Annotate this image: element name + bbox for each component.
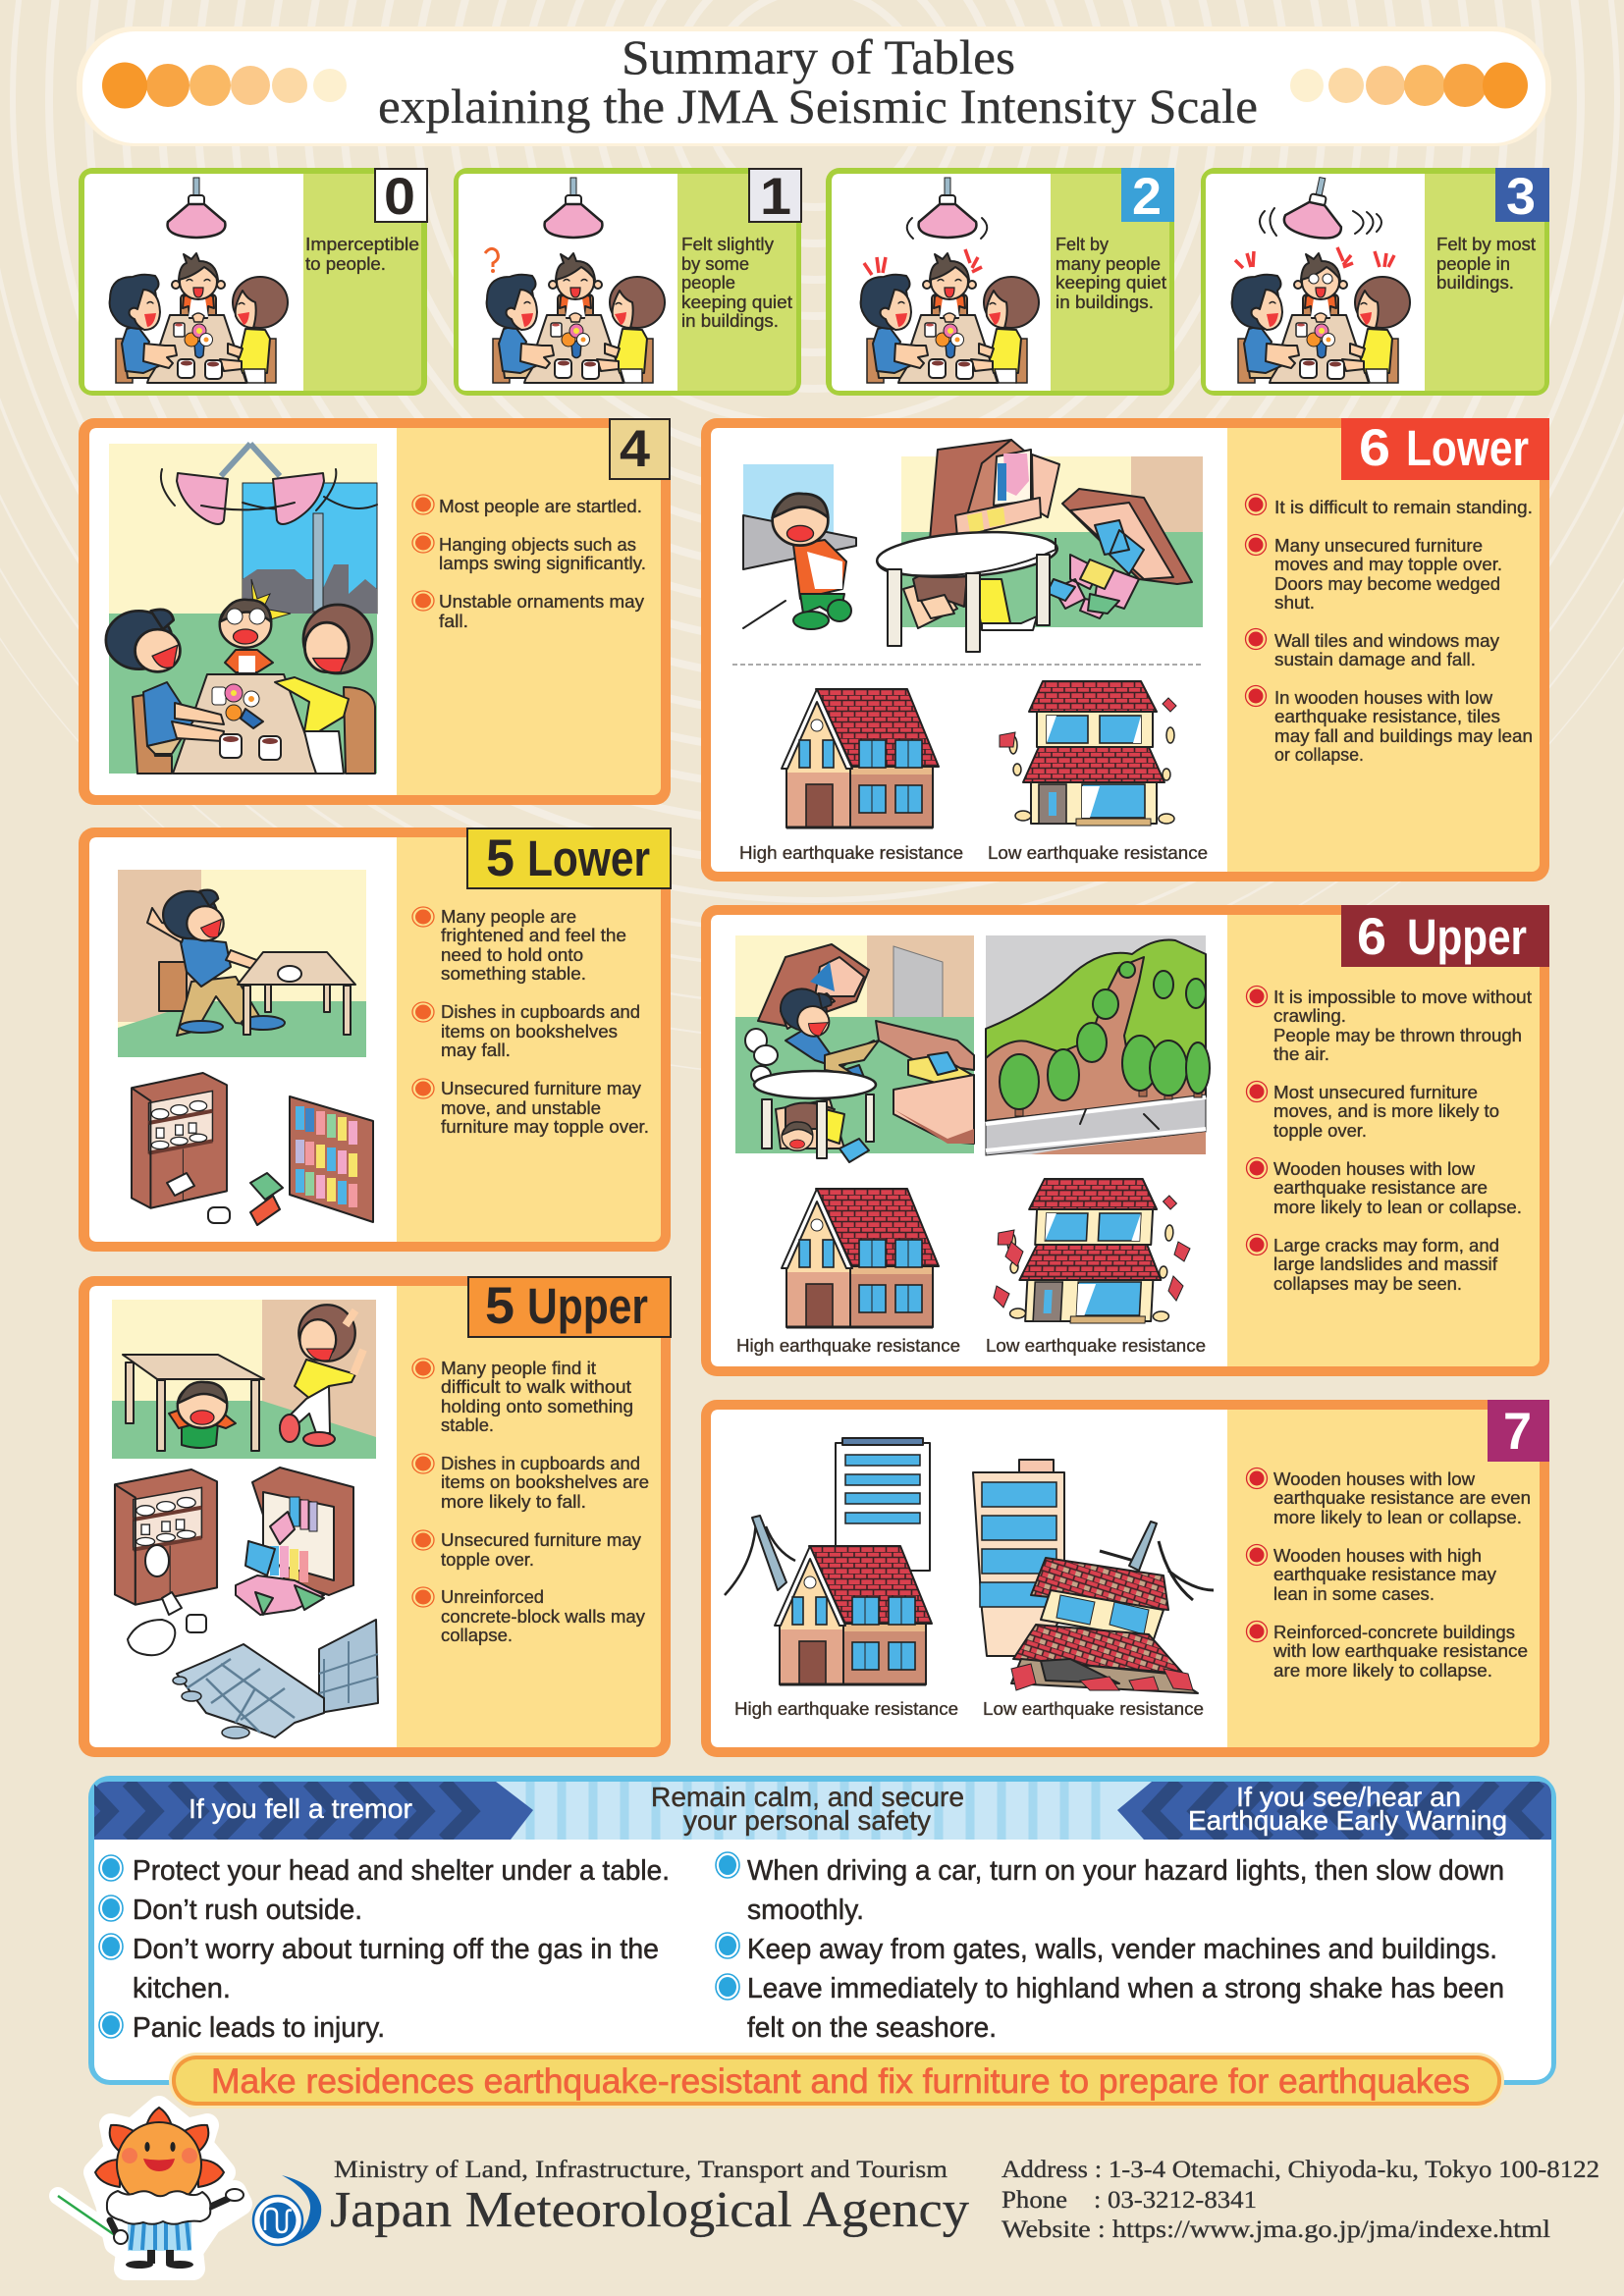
list: early warning advice: When driving a car, turn on your hazard lights, then slow down xyxy=(747,1855,1504,1887)
illustration: swinging lamp and family xyxy=(1232,172,1410,383)
logo xyxy=(253,2175,321,2245)
bullet list: Reinforced-concrete buildings xyxy=(1273,1623,1515,1642)
bullet list: earthquake resistance are xyxy=(1273,1178,1488,1198)
agency name: Japan Meteorological Agency xyxy=(330,2182,969,2238)
bullet list: Unreinforced xyxy=(441,1587,544,1607)
bullet list: In wooden houses with low xyxy=(1274,688,1493,708)
badge 5 lower: Lower xyxy=(527,830,650,886)
captions xyxy=(736,1336,1206,1356)
badge 0: 0 xyxy=(384,168,415,226)
panel: advice box xyxy=(82,1776,1556,2085)
badge 3: 3 xyxy=(1506,168,1536,226)
bullet list: earthquake resistance may xyxy=(1273,1565,1496,1584)
bullet list: concrete-block walls may xyxy=(441,1607,645,1627)
badge 5 upper xyxy=(468,1277,671,1337)
badge 6 lower: 6 xyxy=(1359,419,1390,477)
bullet list: fall. xyxy=(439,612,468,631)
bullet list: shut. xyxy=(1274,593,1315,613)
badge 7 xyxy=(1488,1400,1549,1462)
panel: intensity 3 xyxy=(1201,168,1549,396)
bullet list: It is difficult to remain standing. xyxy=(1274,498,1533,517)
bullet list: Many people find it xyxy=(441,1359,596,1378)
bullet list: Dishes in cupboards and xyxy=(441,1454,640,1473)
bullet list: more likely to lean or collapse. xyxy=(1273,1198,1522,1217)
bullet list xyxy=(1247,986,1532,1294)
description: buildings. xyxy=(1436,273,1514,293)
bullet list: sustain damage and fall. xyxy=(1274,650,1476,669)
illustration: buildings and collapsed houses xyxy=(725,1438,1214,1693)
badge 4 xyxy=(610,419,670,479)
illustration: man stumbling, table, cupboard and bookshelf xyxy=(118,870,373,1225)
description xyxy=(1056,235,1166,312)
badge 5 lower xyxy=(467,828,671,888)
bullet list: holding onto something xyxy=(441,1397,633,1416)
list: early warning advice: Keep away from gates, walls, vender machines and buildings. xyxy=(747,1934,1497,1965)
bullet list: moves and may topple over. xyxy=(1274,555,1502,574)
list: tremor advice: Panic leads to injury. xyxy=(133,2012,385,2044)
bullet list: collapse. xyxy=(441,1626,513,1645)
contact details xyxy=(1001,2157,1599,2243)
bullet list xyxy=(412,495,646,631)
bullet list: It is impossible to move without xyxy=(1273,988,1532,1007)
description: many people xyxy=(1056,254,1161,274)
description: Imperceptible xyxy=(305,235,419,254)
bullet list: large landslides and massif xyxy=(1273,1255,1498,1274)
header arrow left: If you fell a tremor xyxy=(189,1793,412,1824)
panel: intensity 5 lower xyxy=(79,828,671,1252)
list: early warning advice xyxy=(716,1852,1504,2044)
illustration: lamp and family xyxy=(485,178,665,383)
bullet list: items on bookshelves are xyxy=(441,1472,649,1492)
badge 6 upper: Upper xyxy=(1407,909,1527,965)
bullet list xyxy=(412,907,649,1137)
bullet list: are more likely to collapse. xyxy=(1273,1661,1492,1681)
illustration: family startled under swinging lamps xyxy=(106,444,377,774)
captions: Low earthquake resistance xyxy=(983,1699,1204,1719)
captions: Low earthquake resistance xyxy=(988,843,1208,863)
contact details: Address : 1-3-4 Otemachi, Chiyoda-ku, Tokyo 100-8122 xyxy=(1001,2157,1599,2183)
list: tremor advice xyxy=(99,1855,670,2044)
bullet list: Doors may become wedged xyxy=(1274,574,1500,594)
bullet list: earthquake resistance, tiles xyxy=(1274,707,1500,726)
badge 3 xyxy=(1495,168,1549,226)
bullet list: with low earthquake resistance xyxy=(1272,1641,1528,1661)
description: people in xyxy=(1436,254,1510,274)
panel: intensity 0 xyxy=(79,168,427,396)
badge 1 xyxy=(749,168,801,226)
bullet list: Unsecured furniture may xyxy=(441,1079,641,1098)
list: early warning advice: felt on the seashore. xyxy=(747,2012,997,2044)
list: tremor advice: Don’t rush outside. xyxy=(133,1895,362,1926)
title text: explaining the JMA Seismic Intensity Scale xyxy=(378,79,1258,133)
description: in buildings. xyxy=(681,311,779,331)
description: people xyxy=(681,273,735,293)
contact details: Website : https://www.jma.go.jp/jma/indexe.html xyxy=(1001,2216,1550,2243)
bullet list: crawling. xyxy=(1273,1006,1346,1026)
bullet list: lean in some cases. xyxy=(1273,1584,1435,1604)
header centre: Remain calm, and secure xyxy=(651,1782,964,1812)
bullet list: Wooden houses with high xyxy=(1273,1546,1482,1566)
description: keeping quiet xyxy=(681,293,792,312)
decorative circles left xyxy=(102,63,347,108)
bullet list: earthquake resistance are even xyxy=(1273,1488,1531,1508)
description: to people. xyxy=(305,254,386,274)
illustration: falling furniture and shelter under table xyxy=(732,440,1204,828)
badge 6 lower: Lower xyxy=(1406,420,1529,476)
description xyxy=(1436,235,1536,293)
bullet list: Dishes in cupboards and xyxy=(441,1002,640,1022)
header arrow right: Earthquake Early Warning xyxy=(1188,1805,1507,1836)
description xyxy=(681,235,792,331)
bullet list: Many unsecured furniture xyxy=(1274,536,1483,556)
list: early warning advice: Leave immediately to highland when a strong shake has been xyxy=(747,1973,1504,2004)
bullet list: the air. xyxy=(1273,1044,1329,1064)
bullet list: or collapse. xyxy=(1274,745,1364,765)
panel: intensity 5 upper xyxy=(79,1276,671,1757)
banner: preparedness message: Make residences earthquake-resistant and fix furniture to prepare for earthquakes xyxy=(211,2062,1470,2101)
bullet list xyxy=(1245,495,1533,765)
illustration: under the table, bracing on wall, furniture, block wall xyxy=(112,1300,378,1738)
captions: High earthquake resistance xyxy=(736,1336,960,1356)
bullet list: move, and unstable xyxy=(441,1098,601,1118)
captions xyxy=(739,843,1208,863)
bullet list: Many people are xyxy=(441,907,576,927)
bullet list: Wooden houses with low xyxy=(1273,1469,1476,1489)
badge 5 upper: 5 xyxy=(485,1277,514,1335)
bullet list: Wall tiles and windows may xyxy=(1274,631,1499,651)
panel: intensity 1 xyxy=(454,168,801,396)
captions: High earthquake resistance xyxy=(734,1699,958,1719)
bullet list: Hanging objects such as xyxy=(439,535,636,555)
bullet list: stable. xyxy=(441,1415,494,1435)
title text xyxy=(378,29,1258,133)
illustration: lamp and family xyxy=(110,178,288,383)
illustration: lamp and family xyxy=(861,178,1039,383)
panel: intensity 4 xyxy=(79,418,671,805)
list: tremor advice: Don’t worry about turning off the gas in the xyxy=(133,1934,659,1965)
bullet list: topple over. xyxy=(1273,1121,1367,1141)
description xyxy=(305,235,419,274)
description: by some xyxy=(681,254,749,274)
contact details: Phone : 03-3212-8341 xyxy=(1001,2187,1257,2214)
captions xyxy=(734,1699,1204,1719)
mascot xyxy=(58,2108,244,2269)
agency name xyxy=(330,2157,969,2238)
bullet list: collapses may be seen. xyxy=(1273,1274,1462,1294)
badge 7: 7 xyxy=(1503,1403,1532,1461)
bullet list: may fall. xyxy=(441,1041,511,1060)
badge 4: 4 xyxy=(620,420,651,478)
bullet list: more likely to lean or collapse. xyxy=(1273,1508,1522,1527)
badge 0 xyxy=(375,168,427,226)
badge 2 xyxy=(1121,168,1174,226)
badge 5 lower: 5 xyxy=(486,829,514,887)
badge 2: 2 xyxy=(1132,168,1162,226)
title banner xyxy=(77,27,1551,146)
bullet list: Wooden houses with low xyxy=(1273,1159,1476,1179)
badge 6 upper: 6 xyxy=(1357,908,1386,966)
panel: intensity 2 xyxy=(826,168,1174,396)
list: tremor advice: Protect your head and shelter under a table. xyxy=(133,1855,670,1887)
bullet list: Most unsecured furniture xyxy=(1273,1083,1478,1102)
bullet list: more likely to fall. xyxy=(441,1492,586,1512)
decorative circles right xyxy=(1290,63,1528,108)
bullet list: lamps swing significantly. xyxy=(439,554,646,573)
captions: Low earthquake resistance xyxy=(986,1336,1206,1356)
bullet list xyxy=(412,1359,649,1645)
badge 1: 1 xyxy=(760,168,791,226)
bullet list: may fall and buildings may lean xyxy=(1274,726,1533,746)
bullet list: Large cracks may form, and xyxy=(1273,1236,1499,1255)
badge 6 upper xyxy=(1341,905,1549,967)
description: keeping quiet xyxy=(1056,273,1166,293)
header arrow left xyxy=(82,1782,533,1840)
header arrow right xyxy=(1117,1782,1551,1840)
captions: High earthquake resistance xyxy=(739,843,963,863)
bullet list: items on bookshelves xyxy=(441,1022,618,1041)
description: Felt slightly xyxy=(681,235,774,254)
illustration: toppled room and landslide xyxy=(735,935,1210,1327)
list: early warning advice: smoothly. xyxy=(747,1895,864,1926)
bullet list: Unstable ornaments may xyxy=(439,592,644,612)
panel: intensity 6 lower xyxy=(701,418,1549,881)
bullet list xyxy=(1247,1468,1531,1681)
bullet list: Most people are startled. xyxy=(439,497,642,516)
bullet list: moves, and is more likely to xyxy=(1273,1101,1499,1121)
bullet list: difficult to walk without xyxy=(441,1377,631,1397)
badge 5 upper: Upper xyxy=(527,1278,648,1334)
description: Felt by most xyxy=(1436,235,1536,254)
badge 6 lower xyxy=(1341,418,1549,480)
bullet list: topple over. xyxy=(441,1550,534,1570)
bullet list: People may be thrown through xyxy=(1273,1026,1522,1045)
list: tremor advice: kitchen. xyxy=(133,1973,231,2004)
header arrow right: If you see/hear an xyxy=(1236,1782,1461,1812)
bullet list: something stable. xyxy=(441,964,586,984)
bullet list: need to hold onto xyxy=(441,945,583,965)
panel: intensity 6 upper xyxy=(701,905,1549,1376)
bullet list: furniture may topple over. xyxy=(441,1117,649,1137)
title text: Summary of Tables xyxy=(622,29,1015,84)
panel: intensity 7 xyxy=(701,1400,1549,1757)
header centre xyxy=(651,1782,964,1836)
header centre: your personal safety xyxy=(683,1805,931,1836)
banner: preparedness message xyxy=(169,2053,1504,2109)
agency name: Ministry of Land, Infrastructure, Transport and Tourism xyxy=(334,2157,948,2183)
bullet list: Unsecured furniture may xyxy=(441,1530,641,1550)
description: in buildings. xyxy=(1056,293,1154,312)
bullet list: frightened and feel the xyxy=(441,926,626,945)
description: Felt by xyxy=(1056,235,1109,254)
